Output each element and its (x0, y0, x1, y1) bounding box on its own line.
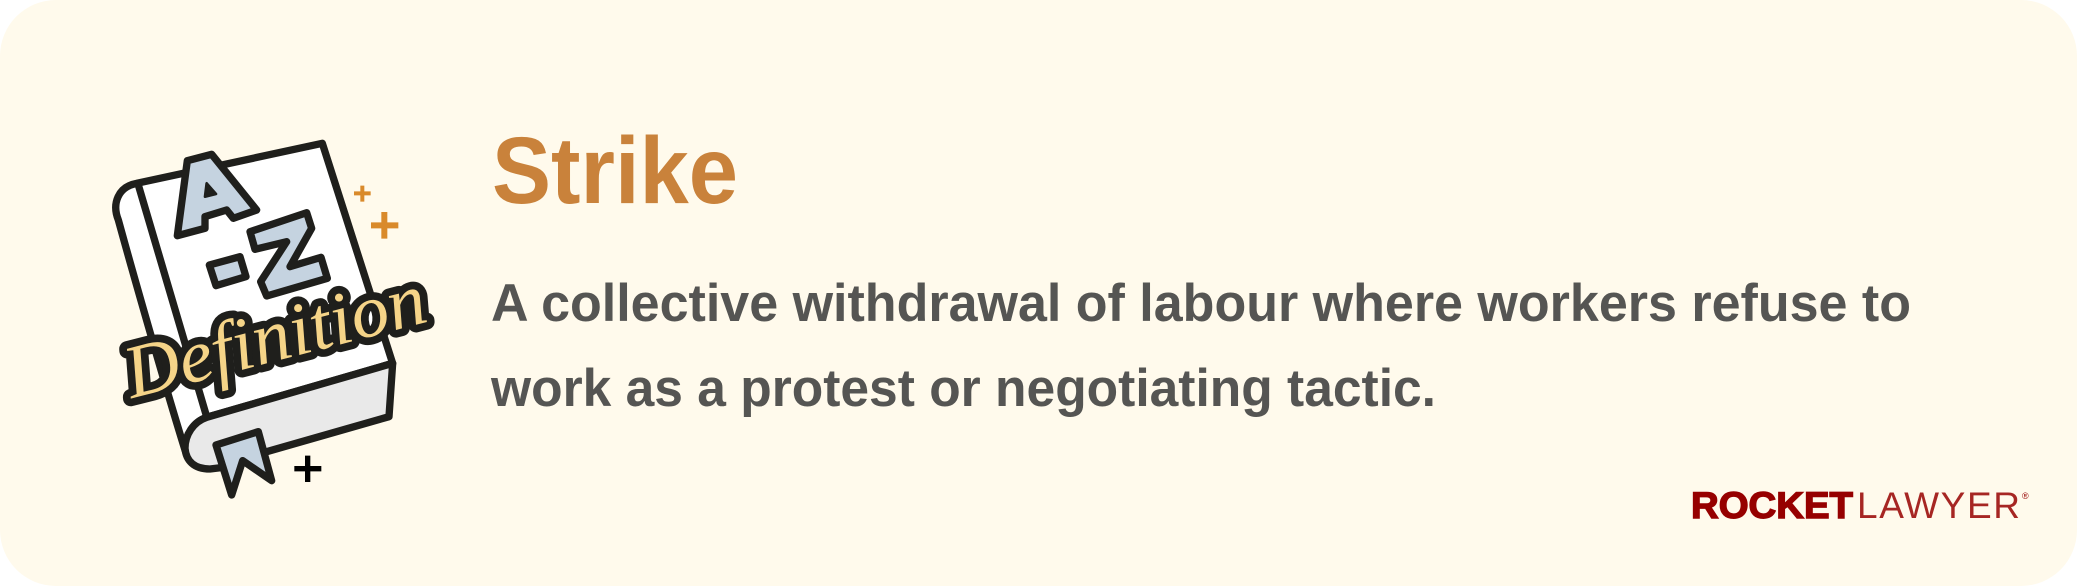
definition line 1: A collective withdrawal of labour where workers refuse to (491, 274, 1911, 333)
large orange plus (371, 212, 398, 239)
definition text (490, 274, 1911, 418)
logo word lawyer: LAWYER (1857, 485, 2020, 526)
book spine line (138, 185, 207, 417)
heading: Strike (492, 118, 738, 224)
letter A counter (205, 183, 216, 197)
logo registered mark: ® (2022, 491, 2029, 501)
letter A (177, 154, 257, 236)
logo word rocket: ROCKET (1691, 485, 1853, 526)
icon: definition book (114, 143, 434, 495)
definition script word: Definition (114, 257, 434, 415)
logo: Rocket Lawyer (1691, 485, 2029, 526)
bookmark ribbon (216, 432, 272, 495)
black plus (294, 456, 321, 482)
small orange plus (354, 186, 371, 202)
book pages (185, 363, 393, 469)
book cover (116, 143, 393, 450)
dash between letters (209, 257, 246, 286)
letter Z (250, 213, 327, 296)
definition line 2: work as a protest or negotiating tactic. (490, 359, 1436, 418)
